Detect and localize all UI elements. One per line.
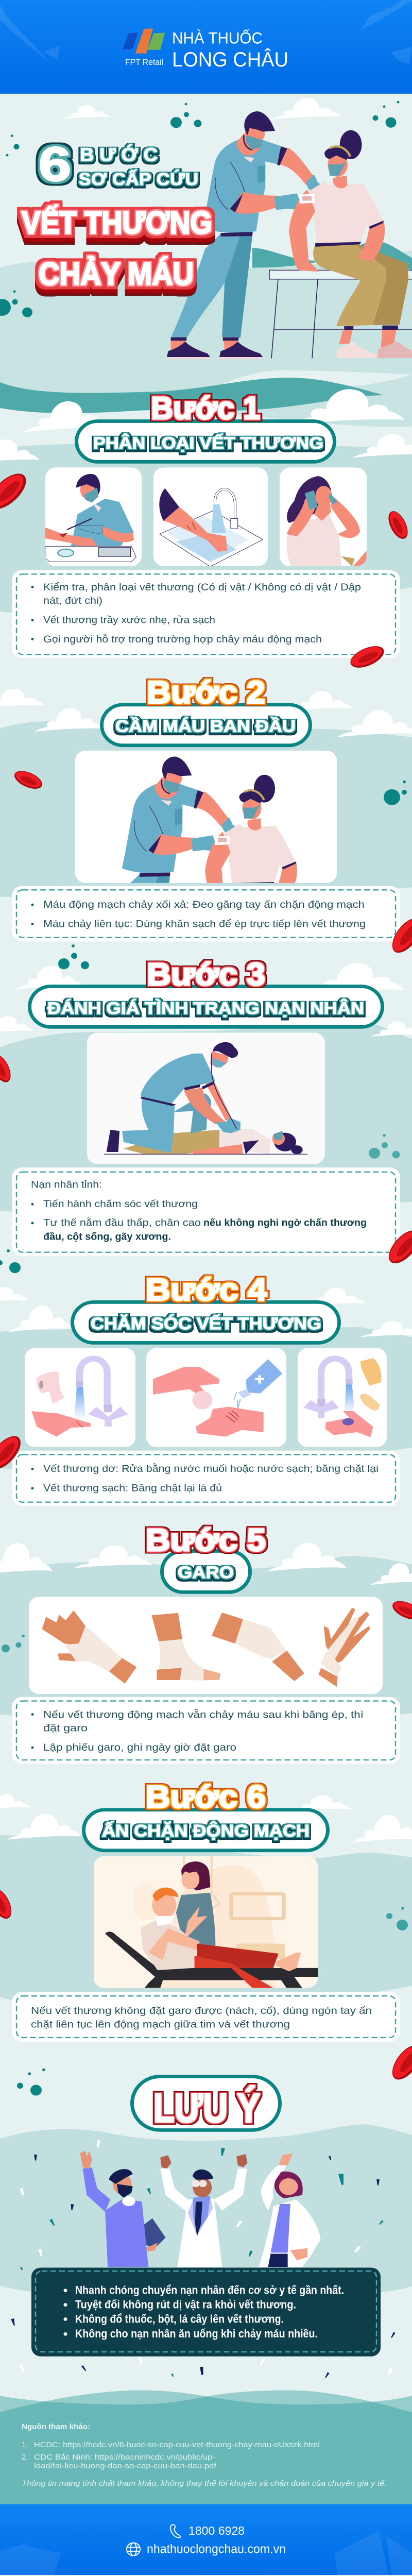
red blood cells	[0, 468, 412, 2084]
references: 1.	[22, 2441, 28, 2449]
step 5 image: bandaged limbs	[29, 1597, 383, 1694]
step 4 image: disinfecting scraped hand	[146, 1348, 286, 1447]
step 1 text box: nát, đứt chi)	[43, 595, 102, 606]
step 4 text box: Vết thương dơ: Rửa bằng nước muối hoặc nước sạch; băng chặt lại	[43, 1463, 379, 1475]
note box	[31, 2267, 381, 2357]
step 1 subheading: PHÂN LOẠI VẾT THƯƠNG	[93, 433, 323, 453]
three cheering medical staff	[80, 2151, 320, 2267]
confetti	[11, 2140, 396, 2378]
step 3 text box: đầu, cột sống, gãy xương.	[43, 1231, 171, 1243]
step 3 image: nurse checks casualty with stethoscope	[87, 1032, 325, 1164]
icon: globe	[127, 2543, 140, 2556]
step 6 image: woman pressing artery of man on a couch	[94, 1856, 318, 1988]
note box: Nhanh chóng chuyển nạn nhân đến cơ sở y tế gần nhất.	[75, 2284, 344, 2296]
step 3 text box: Nạn nhân tỉnh:	[31, 1179, 102, 1191]
brand line 1: NHÀ THUỐC	[172, 28, 263, 47]
step 6 text box	[12, 1992, 400, 2042]
step 5 subheading: GARO	[178, 1563, 234, 1582]
references: Nguồn tham khảo:	[22, 2423, 90, 2431]
title line: CHẢY MÁU: CHẢY MÁU	[39, 256, 194, 292]
title line: VẾT THƯƠNG: VẾT THƯƠNG	[22, 205, 212, 241]
step 4 subheading: CHĂM SÓC VẾT THƯƠNG	[91, 1314, 321, 1333]
step 6 text box: Nếu vết thương không đặt garo được (nách, cổ), dùng ngón tay ấn	[31, 2005, 372, 2016]
bottom waves	[0, 2391, 412, 2505]
note box: Không đổ thuốc, bột, lá cây lên vết thương.	[75, 2313, 284, 2325]
step 5 text box: Lập phiếu garo, ghi ngày giờ đặt garo	[43, 1742, 236, 1753]
title line: BƯỚC: BƯỚC	[80, 144, 158, 165]
staff: man in purple scrubs	[80, 2151, 165, 2267]
staff: man in white coat	[160, 2154, 248, 2267]
step 5 text box: Nếu vết thương động mạch vẫn chảy máu sau khi băng ép, thì	[43, 1709, 364, 1720]
step 3 heading: Bước 3	[147, 957, 265, 992]
step 1 image: washing arm in sink	[153, 467, 268, 567]
logo: FPT Retail mark	[123, 28, 165, 54]
step 5 pill	[162, 1551, 250, 1592]
website: nhathuoclongchau.com.vn	[147, 2543, 286, 2556]
patient figure	[289, 130, 412, 358]
step 1 text box: Gọi người hỗ trợ trong trường hợp chảy máu động mạch	[43, 633, 322, 645]
step 5 text box: đặt garo	[43, 1723, 88, 1734]
logo caption: FPT Retail	[125, 57, 163, 67]
step 3 pill	[30, 986, 382, 1027]
step 2 text box	[12, 886, 400, 941]
step 3 text box: Tiến hành chăm sóc vết thương	[43, 1198, 198, 1210]
step 3 subheading: ĐÁNH GIÁ TÌNH TRẠNG NẠN NHÂN	[47, 998, 364, 1018]
step 4 text box: Vết thương sạch: Băng chặt lại là đủ	[43, 1483, 222, 1494]
background hills	[0, 241, 412, 2296]
step 6 pill	[83, 1810, 328, 1851]
step 2 heading: Bước 2	[147, 675, 265, 710]
nurse figure	[167, 111, 326, 359]
step 6 text box: chặt liên tục lên động mạch giữa tim và vết thương	[31, 2019, 290, 2030]
references: Thông tin mang tính chất tham khảo, không thay thế lời khuyên và chẩn đoán của chuyên gia y tế.	[22, 2480, 387, 2488]
clouds	[0, 98, 412, 1843]
step 2 text box: Máu động mạch chảy xối xả: Đeo găng tay ấn chặn động mạch	[43, 899, 365, 910]
references: load/tai-lieu-huong-dan-so-cap-cuu-ban-dau.pdf	[34, 2462, 217, 2470]
step 4 text box	[12, 1451, 400, 1505]
step 6 subheading: ẤN CHẶN ĐỘNG MẠCH	[102, 1821, 310, 1840]
header band	[0, 0, 412, 94]
title line: SƠ CẤP CỨU: SƠ CẤP CỨU	[79, 169, 198, 189]
step 6 heading: Bước 6	[146, 1780, 266, 1815]
note box: Không cho nạn nhân ăn uống khi chảy máu nhiều.	[75, 2328, 318, 2340]
step 1 heading: Bước 1	[151, 391, 260, 426]
step 2 image: nurse bandaging patient	[75, 750, 337, 883]
bandaged wrist	[318, 1607, 370, 1687]
bandaged hand	[42, 1611, 136, 1684]
note pill	[132, 2077, 280, 2131]
bench	[269, 270, 412, 359]
step 2 pill	[102, 705, 310, 745]
step 4 image: cleaning bruised hand with soap	[298, 1348, 387, 1447]
step 4 pill	[72, 1302, 339, 1343]
step 3 text box: nếu không nghi ngờ chấn thương	[203, 1217, 367, 1229]
step 2 text box: Máu chảy liên tục: Dùng khăn sạch để ép trực tiếp lên vết thương	[43, 919, 366, 929]
references: CDC Bắc Ninh: https://bacninhcdc.vn/public/up-	[34, 2453, 215, 2462]
step 5 heading: Bước 5	[146, 1522, 266, 1558]
step 1 image: nurse examines wound	[45, 467, 142, 566]
brand line 2: LONG CHÂU	[172, 48, 288, 71]
references	[22, 2423, 387, 2488]
step 1 image: woman calling for help	[280, 467, 367, 567]
footer band	[0, 2504, 412, 2575]
step 3 text box: Tư thế nằm đầu thấp, chân cao	[43, 1217, 201, 1229]
staff: woman in white coat	[259, 2153, 320, 2267]
numeral 6: 6	[39, 138, 71, 191]
step 4 heading: Bước 4	[146, 1272, 267, 1308]
phone number: 1800 6928	[188, 2524, 245, 2537]
note box: Tuyệt đối không rút dị vật ra khỏi vết thương.	[75, 2298, 296, 2311]
references: HCDC: https://hcdc.vn/6-buoc-so-cap-cuu-vet-thuong-chay-mau-oUxszk.html	[34, 2441, 320, 2449]
step 2 subheading: CẦM MÁU BAN ĐẦU	[115, 717, 296, 736]
step 1 text box: Vết thương trầy xước nhẹ, rửa sạch	[43, 615, 215, 625]
step 1 text box: Kiểm tra, phân loại vết thương (Có dị vật / Không có dị vật / Dập	[43, 582, 361, 593]
bandaged ankle	[151, 1613, 221, 1681]
step 3 text box	[12, 1167, 400, 1256]
step 1 text box	[12, 570, 400, 658]
step 4 image: rinsing cut finger	[25, 1348, 135, 1447]
note heading: LƯU Ý	[153, 2086, 260, 2131]
hero illustration: nurse bandaging patient	[167, 111, 412, 359]
bandaged elbow	[212, 1613, 304, 1681]
hero title	[22, 138, 212, 292]
step 5 text box	[12, 1697, 400, 1764]
step 1 pill	[76, 421, 335, 462]
references: 2.	[22, 2453, 28, 2462]
teal dots	[0, 101, 408, 2096]
icon: phone	[170, 2524, 180, 2537]
